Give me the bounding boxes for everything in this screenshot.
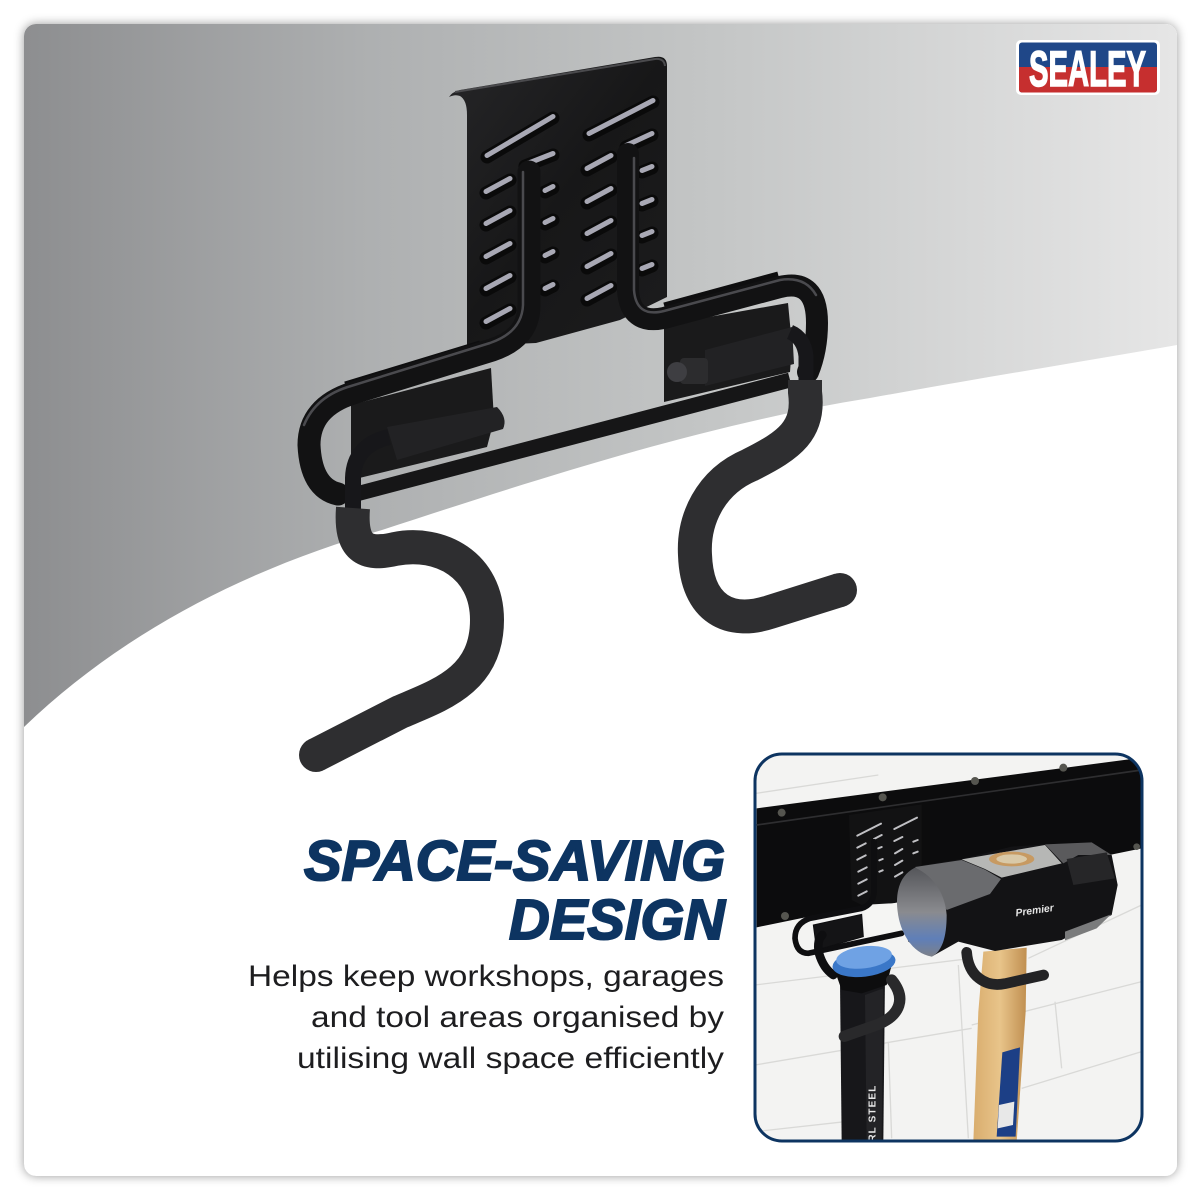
- body text: [248, 960, 724, 1075]
- hammer head: [897, 842, 1118, 957]
- right sleeve: [705, 327, 794, 386]
- heading: [304, 829, 727, 952]
- white gap under plate: [892, 902, 897, 904]
- foam grip right: [695, 380, 857, 616]
- product: wall hook: [299, 57, 857, 772]
- left arm: [353, 437, 389, 512]
- foam grip left: [299, 508, 487, 772]
- body text: Helps keep workshops, garages: [248, 960, 724, 993]
- right arm: [790, 332, 806, 382]
- plate top lip highlight: [455, 59, 665, 92]
- wall rail: [757, 758, 1142, 927]
- left bracket block: [351, 368, 494, 480]
- hammer head: Premier: [1015, 903, 1055, 919]
- heading: DESIGN: [509, 888, 727, 952]
- pry bar: [831, 943, 900, 1142]
- mini plate and slots: [872, 898, 898, 904]
- brick wall: [745, 775, 1142, 1138]
- plate slots: [486, 100, 653, 323]
- mini hook: [795, 842, 902, 975]
- body text: utilising wall space efficiently: [297, 1042, 724, 1075]
- top strips behind wire: [345, 274, 778, 384]
- hook back plate: [449, 57, 667, 346]
- wire frame left: [304, 172, 529, 494]
- foam hook under hammer: [967, 952, 1044, 984]
- hammer handle: [973, 948, 1027, 1142]
- wire frame right: [628, 154, 817, 372]
- body text: and tool areas organised by: [311, 1001, 724, 1034]
- bolt: [667, 358, 708, 384]
- pry bar: RL STEEL: [868, 1086, 879, 1142]
- left sleeve: [387, 407, 505, 460]
- heading: SPACE-SAVING: [304, 829, 725, 893]
- right bracket block: [664, 303, 792, 402]
- lower rod: [345, 380, 790, 497]
- inset photo: [745, 754, 1142, 1142]
